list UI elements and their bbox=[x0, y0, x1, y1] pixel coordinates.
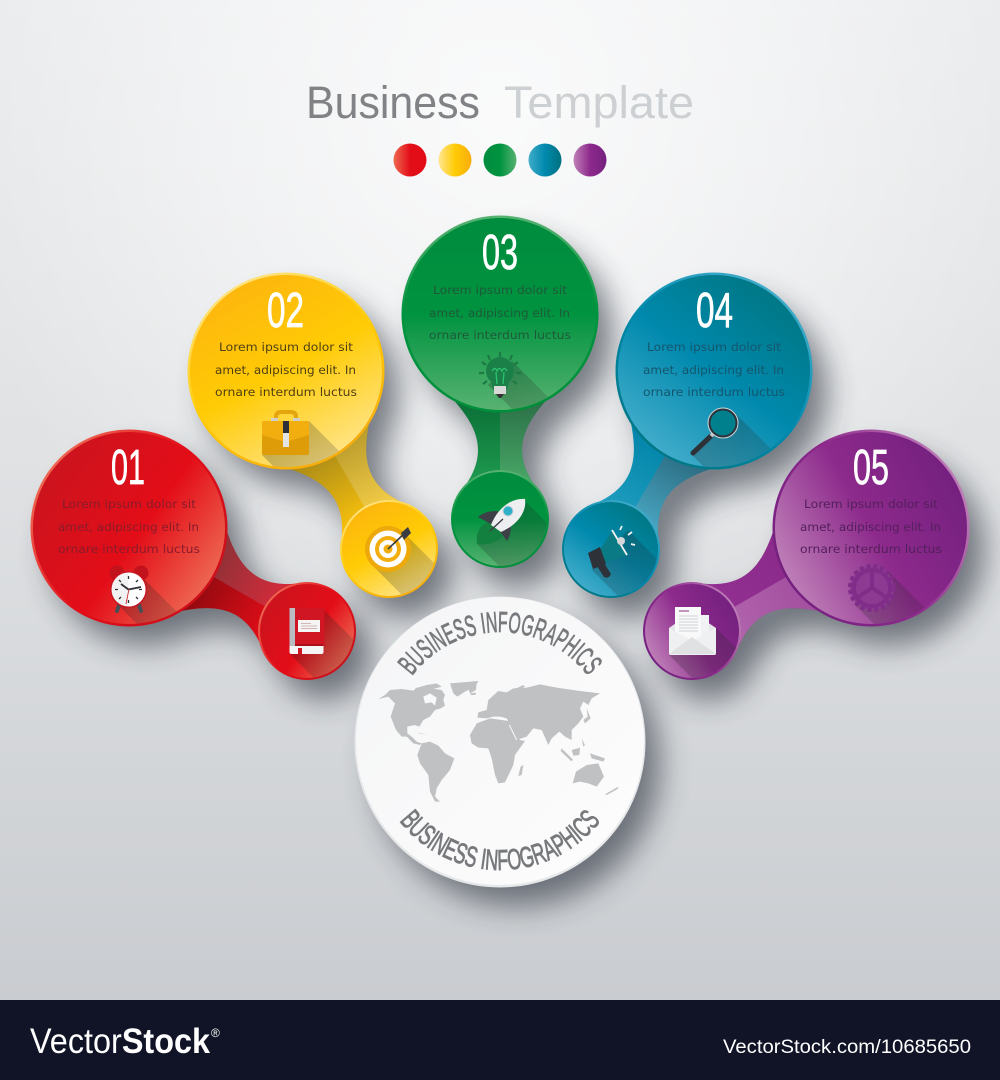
number: 04 bbox=[696, 284, 733, 338]
icon: light bulb bbox=[479, 352, 521, 398]
description: ornare interdum luctus bbox=[215, 385, 357, 399]
large disc bbox=[616, 272, 812, 470]
description bbox=[429, 283, 571, 342]
small disc bbox=[340, 500, 438, 598]
description: Lorem ipsum dolor sit bbox=[219, 340, 354, 354]
icon: briefcase bbox=[262, 410, 309, 455]
stock id: VectorStock.com/10685650 bbox=[723, 1036, 971, 1058]
description: amet, adipiscing elit. In bbox=[215, 363, 356, 377]
description: amet, adipiscing elit. In bbox=[800, 520, 941, 534]
number: 03 bbox=[482, 226, 518, 280]
description: ornare interdum luctus bbox=[58, 542, 200, 556]
panel: step 02 yellow bbox=[188, 272, 438, 598]
connector neck bbox=[178, 528, 302, 656]
icon: megaphone bbox=[588, 526, 635, 578]
description bbox=[643, 340, 785, 399]
icon: rocket bbox=[477, 499, 525, 544]
VectorStock logo: VectorStock bbox=[30, 1022, 210, 1061]
small disc bbox=[451, 470, 549, 568]
connector neck bbox=[698, 528, 822, 656]
title bbox=[306, 77, 694, 128]
top curved label: BUSINESS INFOGRAPHICS bbox=[396, 612, 602, 676]
icon: magnifier bbox=[693, 408, 738, 453]
number: 01 bbox=[111, 441, 145, 495]
large disc bbox=[188, 272, 384, 470]
icon: target bbox=[365, 526, 411, 572]
small disc bbox=[643, 582, 741, 680]
title: Business bbox=[306, 77, 480, 128]
footer bar bbox=[0, 1000, 1000, 1080]
panel: step 05 purple bbox=[643, 430, 970, 735]
panel: step 01 red bbox=[30, 430, 356, 680]
colour dots bbox=[394, 144, 606, 176]
number: 05 bbox=[853, 441, 889, 495]
bottom curved label: BUSINESS INFOGRAPHICS bbox=[400, 808, 599, 870]
description: Lorem ipsum dolor sit bbox=[804, 497, 939, 511]
title: Template bbox=[504, 77, 694, 128]
description: amet, adipiscing elit. In bbox=[58, 520, 199, 534]
panel: central globe disc bbox=[354, 596, 646, 888]
description: Lorem ipsum dolor sit bbox=[647, 340, 782, 354]
small disc bbox=[562, 500, 660, 598]
number: 02 bbox=[267, 284, 304, 338]
world map bbox=[378, 681, 618, 802]
description bbox=[215, 340, 357, 399]
connector neck bbox=[586, 420, 714, 544]
icon: gear bbox=[850, 566, 894, 610]
connector neck bbox=[286, 420, 414, 544]
description: amet, adipiscing elit. In bbox=[643, 363, 784, 377]
description: amet, adipiscing elit. In bbox=[429, 306, 570, 320]
icon: book bbox=[290, 608, 324, 654]
description bbox=[800, 497, 942, 556]
description: ornare interdum luctus bbox=[429, 328, 571, 342]
description: Lorem ipsum dolor sit bbox=[433, 283, 568, 297]
icon: alarm clock bbox=[110, 566, 148, 611]
connector neck bbox=[452, 398, 548, 486]
panel: step 04 blue bbox=[562, 272, 812, 598]
soft drop shadows bbox=[50, 239, 984, 906]
description: Lorem ipsum dolor sit bbox=[62, 497, 197, 511]
large disc bbox=[30, 430, 228, 626]
large disc bbox=[402, 216, 598, 412]
description: ornare interdum luctus bbox=[643, 385, 785, 399]
icon: envelope bbox=[669, 607, 716, 655]
small disc bbox=[258, 582, 356, 680]
description: ornare interdum luctus bbox=[800, 542, 942, 556]
large disc bbox=[772, 430, 970, 626]
panel: step 03 green bbox=[402, 216, 598, 568]
registered mark: ® bbox=[211, 1026, 220, 1040]
description bbox=[58, 497, 200, 556]
